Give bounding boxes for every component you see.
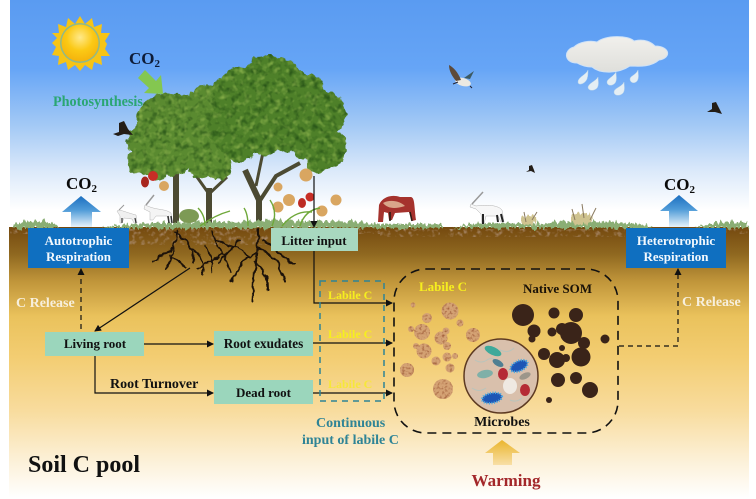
tree foliage: large xyxy=(208,56,346,174)
label: Continuous input of labile C xyxy=(302,416,399,448)
panel: Heterotrophic Respiration: Respiration xyxy=(644,249,709,264)
box: Dead root xyxy=(214,380,313,404)
label: Root Turnover: Root Turnover xyxy=(110,377,198,392)
ground grass strip xyxy=(12,220,748,228)
dashed box: soil organic matter pool xyxy=(394,269,618,433)
arrow: roots to living root xyxy=(95,268,190,331)
box: Root exudates xyxy=(214,331,313,356)
label: Labile C top: Labile C xyxy=(328,288,372,302)
arrow: heterotrophic CO2 up xyxy=(660,195,698,227)
label: Continuous input of labile C: input of labile C xyxy=(302,433,399,448)
box: Litter input: Litter input xyxy=(281,233,347,248)
particles: labile C xyxy=(400,302,480,399)
label: Warming: Warming xyxy=(472,471,541,490)
arrow: living root to exudates xyxy=(144,343,213,345)
label: Continuous input of labile C: Continuous xyxy=(316,416,386,431)
label: heterotrophic CO2: 2 xyxy=(690,184,696,196)
icon: microbes circle xyxy=(464,339,538,413)
roots xyxy=(153,230,295,302)
animal: small oryx xyxy=(117,205,137,223)
label: Photosynthesis: Photosynthesis xyxy=(53,94,143,110)
animal: oryx right xyxy=(470,192,504,224)
arrow: root turnover xyxy=(95,356,213,393)
icon: sun xyxy=(52,16,110,71)
panel: Heterotrophic Respiration xyxy=(626,228,726,268)
topsoil litter band xyxy=(10,229,748,245)
box: Living root: Living root xyxy=(64,336,127,351)
arrow: autotrophic CO2 up xyxy=(62,196,101,227)
box: Living root xyxy=(45,332,144,356)
box: Dead root: Dead root xyxy=(236,385,292,400)
label: Native SOM: Native SOM xyxy=(523,281,592,296)
icon: bird small xyxy=(526,165,535,173)
panel: Autotrophic Respiration xyxy=(28,228,129,268)
falling leaves xyxy=(141,168,342,216)
box: Litter input xyxy=(271,228,358,251)
arrow: leaves to litter xyxy=(313,176,315,227)
label: autotrophic CO2: CO xyxy=(66,174,92,193)
label: C Release left: C Release xyxy=(16,296,75,311)
tree foliage: left and middle xyxy=(127,86,248,181)
arrow: exudates to SOM xyxy=(313,342,392,344)
sky background xyxy=(10,0,749,228)
particles: native SOM xyxy=(512,304,610,403)
box: Root exudates: Root exudates xyxy=(224,336,303,351)
grass tufts xyxy=(520,213,592,225)
animal: horse xyxy=(378,196,416,222)
panel: Autotrophic Respiration: Autotrophic xyxy=(45,233,113,248)
animal: oryx xyxy=(144,195,172,223)
icon: bird right xyxy=(707,102,722,114)
panel: Heterotrophic Respiration: Heterotrophic xyxy=(637,233,715,248)
shrub xyxy=(179,209,199,223)
icon: bird left xyxy=(113,121,133,136)
label: CO2 photosynthesis: CO xyxy=(129,49,154,68)
trees xyxy=(127,56,346,226)
title: Soil C pool: Soil C pool xyxy=(28,452,140,478)
label: CO2 photosynthesis: 2 xyxy=(154,58,160,70)
label: Microbes: Microbes xyxy=(474,415,530,430)
panel: Autotrophic Respiration: Respiration xyxy=(46,249,112,264)
icon: seagull xyxy=(449,65,474,88)
dashed box: continuous input xyxy=(320,281,384,401)
arrow: autotrophic C release xyxy=(80,269,82,329)
soil background xyxy=(9,227,749,498)
arrow: heterotrophic C release xyxy=(619,269,678,346)
arrow: CO2 uptake xyxy=(138,70,163,94)
label: Labile C bottom: Labile C xyxy=(328,377,372,391)
label: autotrophic CO2: 2 xyxy=(92,183,98,195)
tree trunks xyxy=(176,133,300,226)
label: heterotrophic CO2: CO xyxy=(664,175,690,194)
icon: cloud with rain xyxy=(566,37,668,95)
label: Labile C middle: Labile C xyxy=(328,327,372,341)
label: Labile C in pool: Labile C xyxy=(419,279,467,294)
arrow: litter to SOM xyxy=(314,251,392,303)
arrow: warming xyxy=(485,440,520,465)
label: C Release right: C Release xyxy=(682,295,741,310)
arrow: dead root to SOM xyxy=(313,392,392,394)
